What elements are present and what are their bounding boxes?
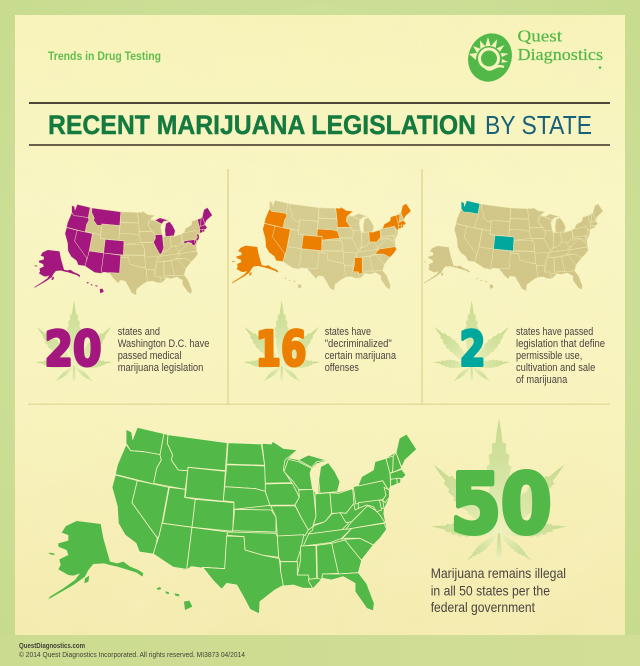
text: federal description: federal government <box>431 599 535 615</box>
title block <box>29 102 610 146</box>
logo wordmark: Quest <box>518 27 562 46</box>
number 50: 50 <box>450 458 552 552</box>
icon: leaf <box>32 300 116 383</box>
panel: federal illegal <box>426 418 572 615</box>
map: all 50 states green <box>48 427 417 614</box>
text: federal description: in all 50 states per the <box>431 582 550 598</box>
text: federal description: Marijuana remains illegal <box>431 565 566 581</box>
panel: medical marijuana <box>32 204 212 383</box>
map: 16 states orange <box>232 200 411 291</box>
panel: decriminalized <box>232 200 411 383</box>
text: 16 description: certain marijuana <box>325 350 397 362</box>
footer text: © 2014 Quest Diagnostics Incorporated. All rights reserved. MI3873 04/2014 <box>19 651 245 659</box>
icon: leaf <box>430 300 513 383</box>
title secondary text: BY STATE <box>485 110 592 140</box>
text: 16 description: states have <box>325 326 371 338</box>
text: 20 description: states and <box>118 326 160 338</box>
logo wordmark: Diagnostics <box>518 45 603 64</box>
text: 2 description: states have passed <box>516 326 593 338</box>
text: 16 description: offenses <box>325 362 359 374</box>
text: 16 description: "decriminalized" <box>325 338 392 350</box>
map: 2 states teal <box>423 201 603 291</box>
text: 2 description: permissible use, <box>516 350 582 362</box>
text: 2 description: cultivation and sale <box>516 362 595 374</box>
number 20: 20 <box>44 322 102 378</box>
text: 20 description: Washington D.C. have <box>118 338 209 350</box>
text: 2 description: of marijuana <box>516 374 568 386</box>
icon: large leaf <box>426 418 572 563</box>
text: 2 description: legislation that define <box>516 338 605 350</box>
text: 20 description: passed medical <box>118 350 181 362</box>
text: 20 description: marijuana legislation <box>118 362 203 374</box>
footer band <box>0 635 640 666</box>
footer text: QuestDiagnostics.com <box>19 643 85 650</box>
title main text: RECENT MARIJUANA LEGISLATION <box>48 110 476 140</box>
logo: Quest Diagnostics <box>461 27 603 88</box>
icon: Quest sun emblem <box>461 27 519 88</box>
icon: leaf <box>240 300 323 383</box>
panel: legalized <box>423 201 605 386</box>
number 16: 16 <box>256 322 306 378</box>
number 2: 2 <box>460 322 486 378</box>
map: 20 states purple <box>34 204 212 295</box>
header label: trends in drug testing: Trends in Drug Testing <box>48 49 161 63</box>
